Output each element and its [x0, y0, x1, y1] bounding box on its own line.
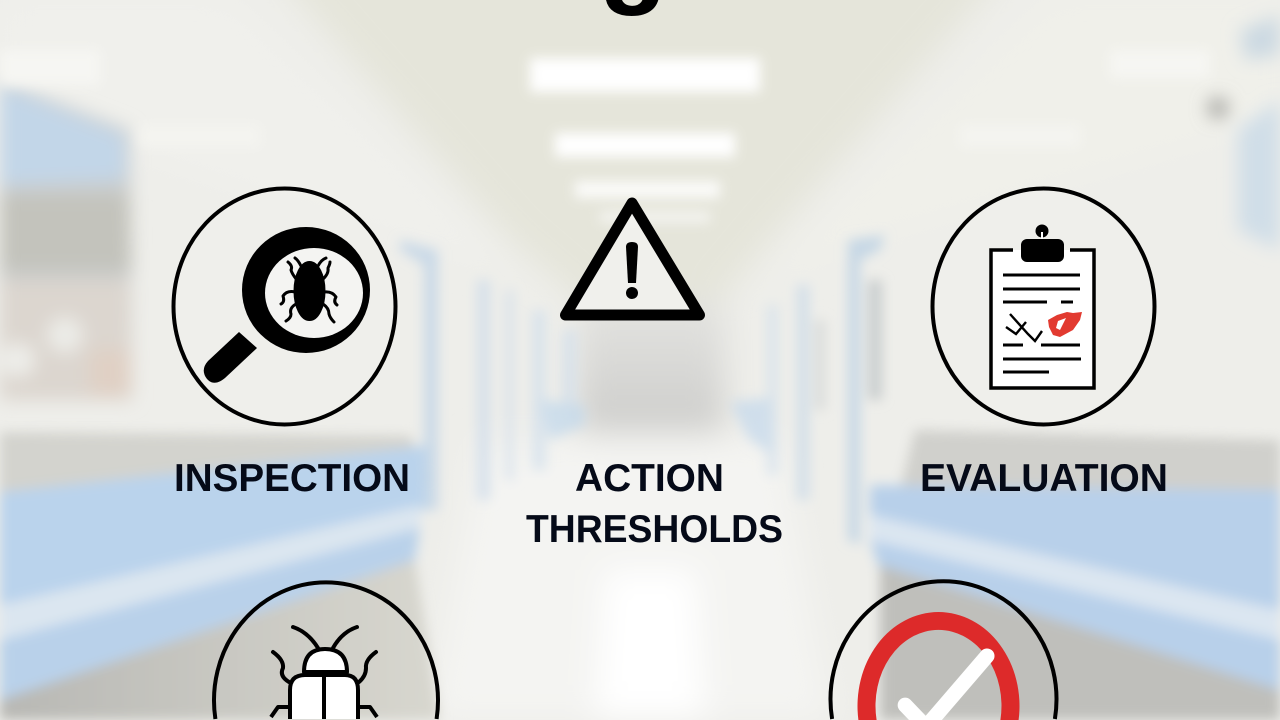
red mark	[1048, 312, 1082, 337]
check mark	[898, 648, 995, 720]
clip	[1021, 224, 1064, 262]
bug silhouette	[281, 258, 337, 322]
label: action thresholds: ACTION	[575, 457, 724, 500]
red ring	[857, 612, 1019, 720]
beetle outline	[271, 627, 377, 719]
label: action thresholds: THRESHOLDS	[526, 508, 783, 551]
doors	[400, 235, 885, 545]
icon: inspection magnifier with bug	[174, 188, 396, 424]
left picture	[0, 80, 132, 400]
exclamation mark	[626, 242, 638, 299]
ceiling lights	[530, 58, 760, 92]
clipboard sheet	[991, 250, 1094, 388]
document lines	[1003, 275, 1081, 372]
icon: beetle in circle	[214, 582, 438, 719]
label: action thresholds	[526, 457, 783, 551]
left bench	[0, 432, 430, 500]
label: evaluation: EVALUATION	[920, 457, 1168, 500]
magnifier lens	[242, 227, 370, 353]
right wall window	[1238, 100, 1280, 250]
icon: warning triangle	[566, 203, 700, 315]
label: inspection: INSPECTION	[174, 457, 410, 500]
icon: evaluation clipboard	[932, 188, 1154, 424]
right bench	[900, 430, 1280, 500]
magnifier handle	[204, 332, 257, 383]
signature	[1006, 314, 1042, 341]
icon: red ring with check mark	[830, 581, 1056, 720]
